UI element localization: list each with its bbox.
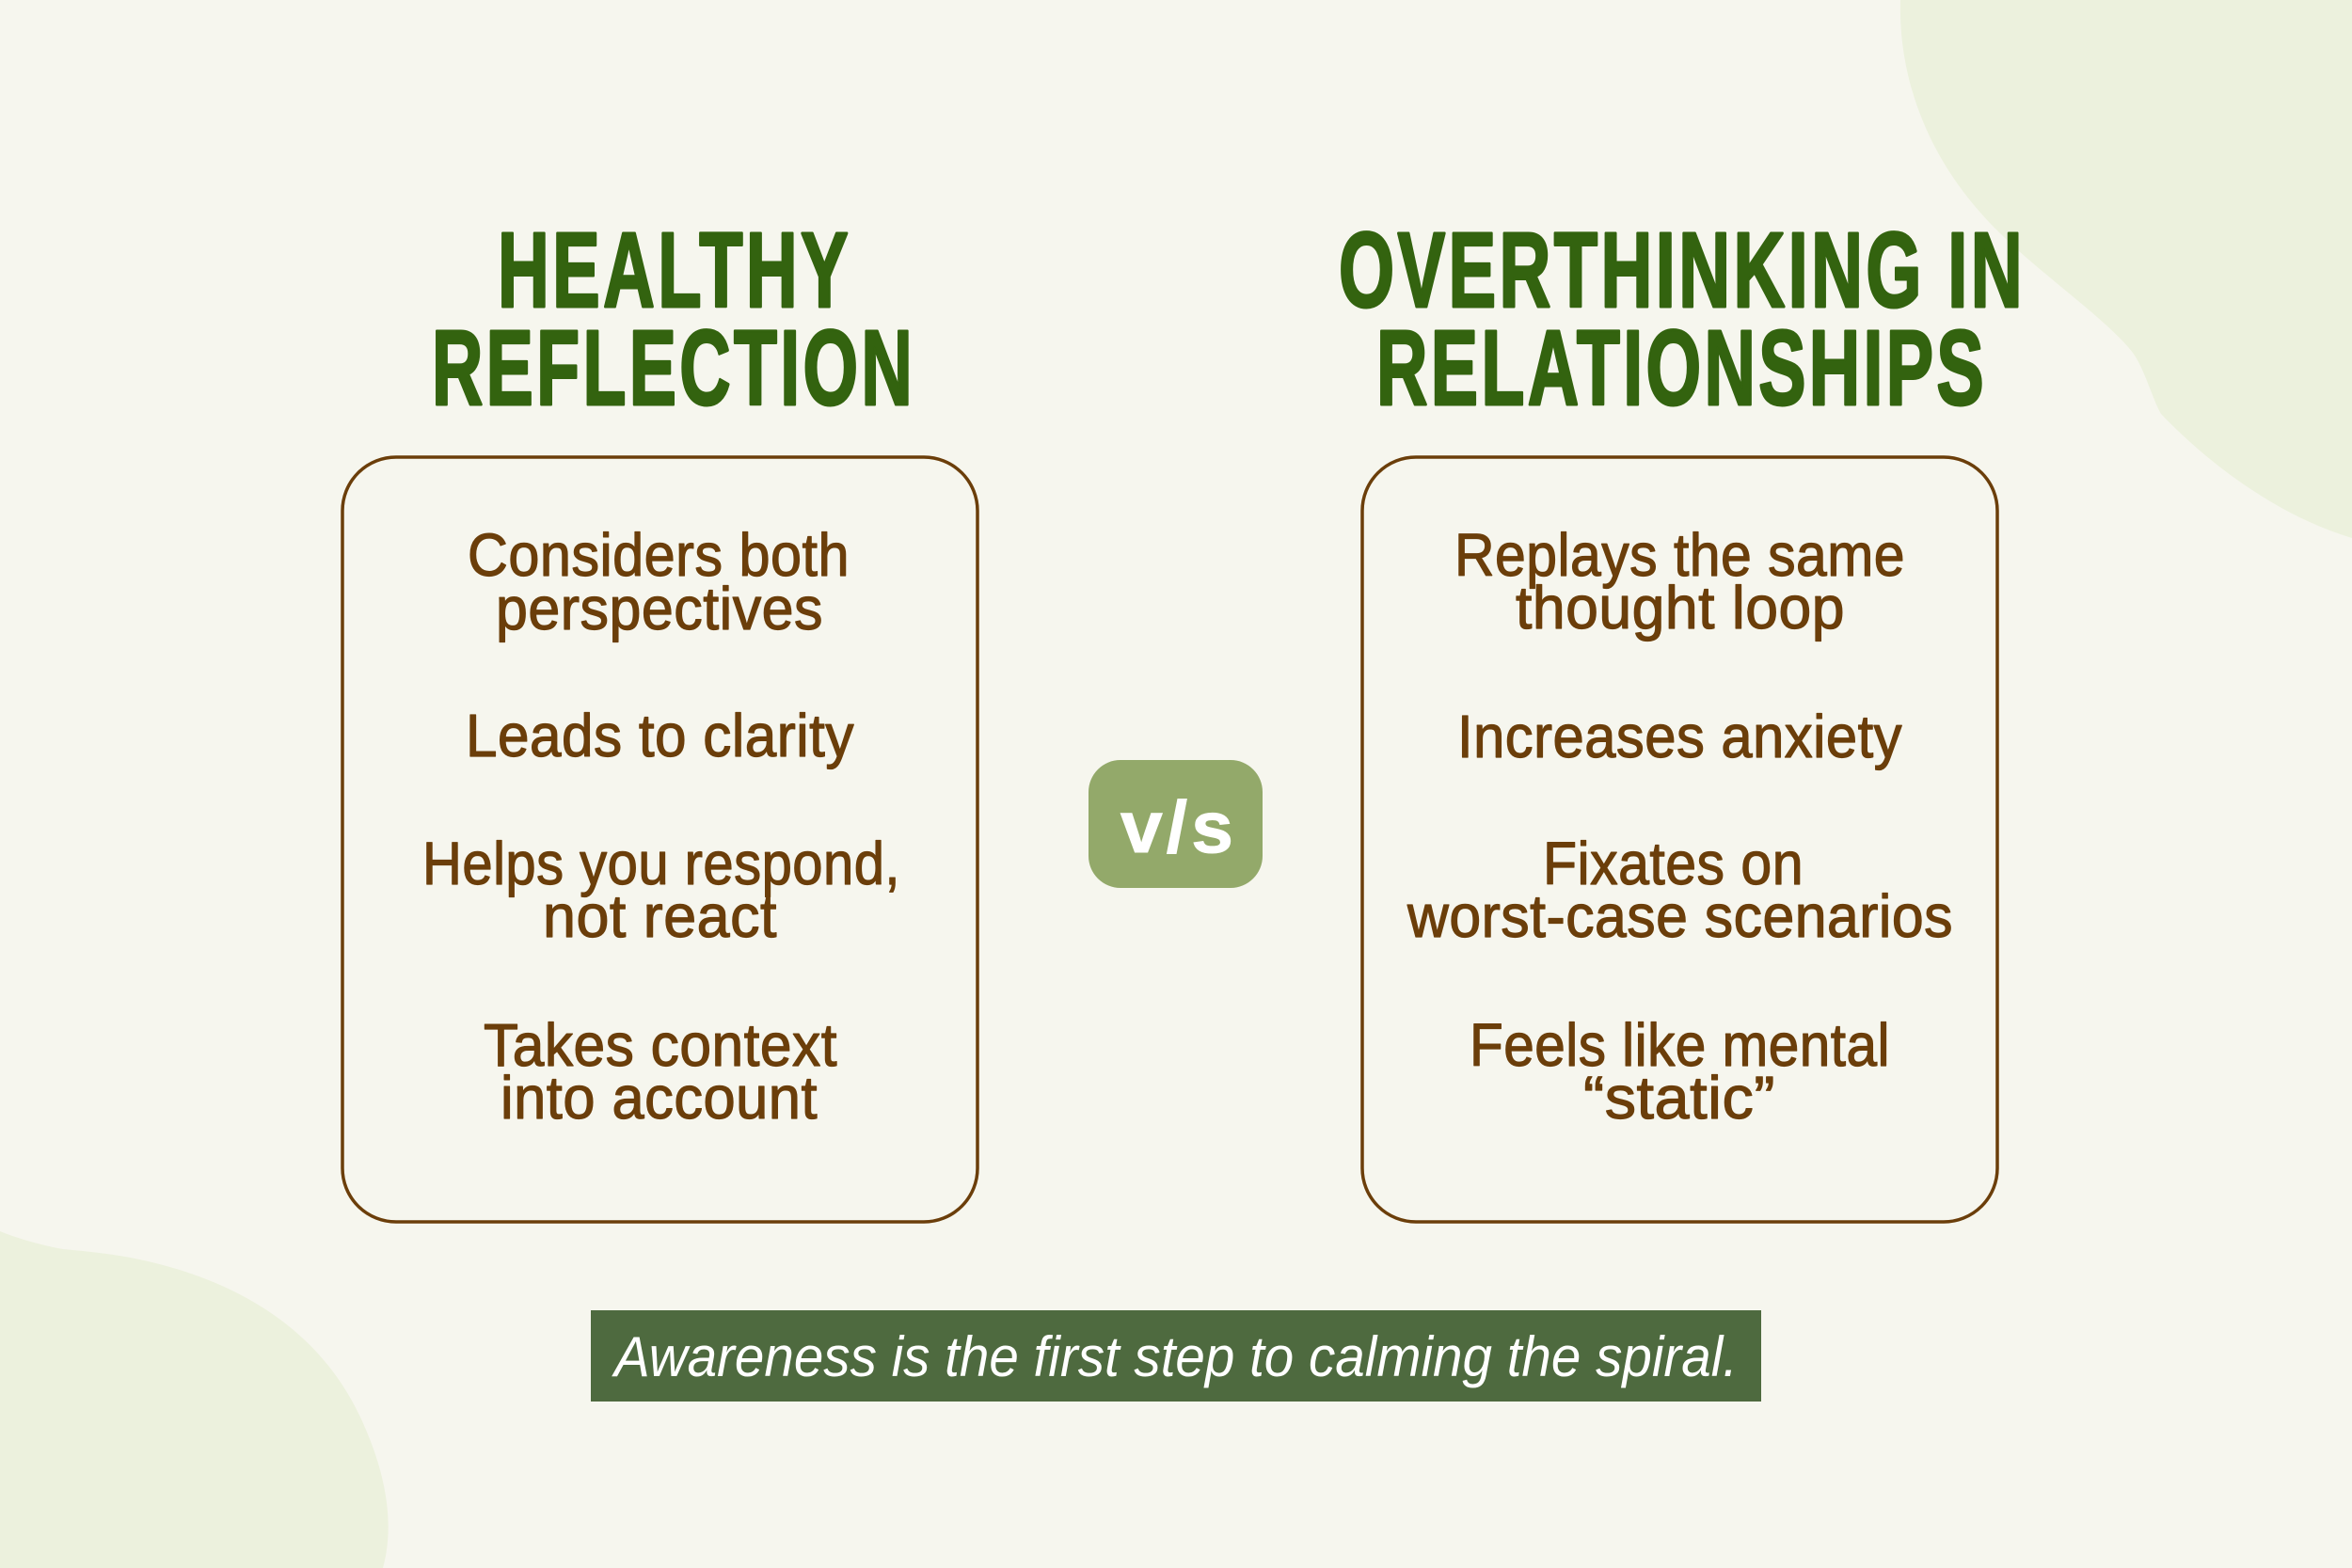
list item: helps you respond: Helps you respond, xyxy=(422,830,900,897)
list item: feels like mental static xyxy=(1470,1011,1890,1132)
panel: overthinking in relationships xyxy=(1362,457,1997,1222)
heading: overthinking in relationships xyxy=(1339,211,2026,427)
takeaway banner: Awareness is the first step to calming the spiral. xyxy=(612,1325,1738,1388)
list item: takes context into account xyxy=(484,1011,837,1132)
list item: considers both perspectives: perspectives xyxy=(496,575,823,642)
list item: leads to clarity: Leads to clarity xyxy=(466,702,854,769)
list item: fixates on worst-case scenarios: Fixates on xyxy=(1543,830,1804,897)
list item: feels like mental static: Feels like mental xyxy=(1470,1011,1890,1079)
list item: takes context into account: into account xyxy=(501,1064,818,1132)
decorative blob: top right xyxy=(1900,0,2352,538)
versus badge xyxy=(1089,760,1263,888)
list item: fixates on worst-case scenarios xyxy=(1406,830,1953,950)
list item: increases anxiety: Increases anxiety xyxy=(1457,703,1902,770)
list item: feels like mental static: “static” xyxy=(1583,1064,1775,1132)
list item: considers both perspectives: Considers both xyxy=(468,521,850,589)
heading: overthinking in relationships: RELATIONSHIPS xyxy=(1376,309,1987,427)
panel outline xyxy=(342,457,977,1222)
decorative blob: bottom left xyxy=(0,1231,389,1568)
versus badge: v/s xyxy=(1120,785,1237,868)
list item: fixates on worst-case scenarios: worst-case scenarios xyxy=(1406,882,1953,950)
list item: helps you respond xyxy=(422,830,900,950)
heading: healthy reflection: HEALTHY xyxy=(498,211,851,329)
list item: replays the same thought loop: thought loop xyxy=(1516,574,1845,641)
list item: replays the same thought loop: Replays the same xyxy=(1454,521,1905,589)
heading: overthinking in relationships: OVERTHINKING IN xyxy=(1339,211,2026,329)
list item: helps you respond: not react xyxy=(543,882,777,950)
panel: healthy reflection xyxy=(342,457,977,1222)
panel outline xyxy=(1362,457,1997,1222)
list item: replays the same thought loop xyxy=(1454,521,1905,641)
takeaway banner xyxy=(591,1310,1761,1402)
heading: healthy reflection xyxy=(432,211,915,427)
list item: takes context into account: Takes context xyxy=(484,1011,837,1079)
heading: healthy reflection: REFLECTION xyxy=(432,309,915,427)
list item: considers both perspectives xyxy=(468,521,850,642)
